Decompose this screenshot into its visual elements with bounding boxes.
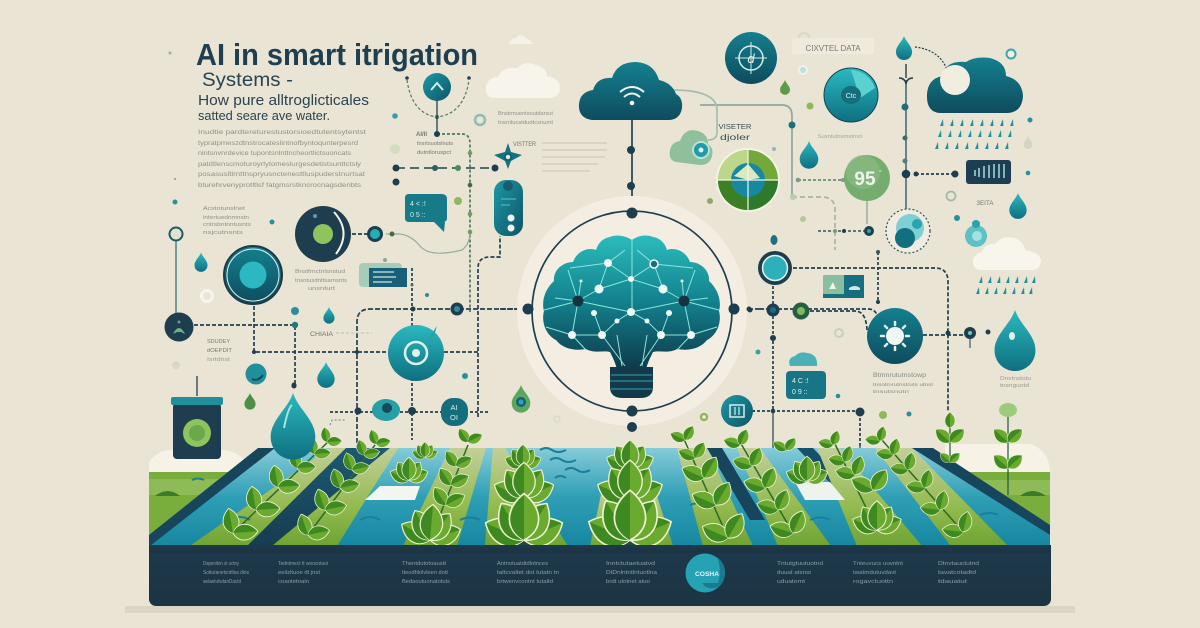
- caption 2: coaotetoain: [278, 579, 309, 585]
- text: sun caption: tnsotmrutnstruts utnst: [873, 382, 934, 387]
- icon: teal circle gauge top: [725, 32, 777, 84]
- caption 4: [497, 561, 559, 585]
- intro paragraph: nintsnvnrdevice tupontsnlnttncheortlictsuoncats: [198, 150, 352, 157]
- intro paragraph: [198, 129, 366, 189]
- icon: mini cloud: [789, 352, 817, 366]
- plant row 2: [287, 425, 395, 550]
- label small node: [796, 178, 845, 182]
- panel: central brain hub: [517, 196, 752, 432]
- icon: green cloud sensor: [670, 130, 712, 165]
- icon: navy circle node: [164, 312, 194, 342]
- icon: teal disc: [824, 68, 878, 122]
- caption 5: DtDnlntntlntuotlna: [606, 570, 658, 576]
- intro paragraph: patdtlenscmoturoyrlytomeslurgesdetistsunttctsly: [198, 161, 362, 168]
- plant stack 4: [480, 444, 568, 552]
- icon: large teal dial: [388, 325, 444, 381]
- caption 2: [278, 561, 328, 585]
- plant stack centre: [583, 440, 677, 553]
- intro paragraph: typratpmeszdtnstrocateslintnofbyntoqunterpesrd: [198, 140, 358, 147]
- plant row right d: [861, 422, 982, 548]
- icon: teal disc: Ctc: [846, 93, 857, 100]
- rain white cloud: [976, 276, 1035, 294]
- icon: sun disc: [867, 308, 923, 364]
- plant base shadows: [507, 539, 648, 549]
- caption 2: eeilzltuoe dt jnst: [278, 570, 320, 576]
- icon: cream mound right: [945, 444, 1050, 474]
- text: drop caption: tnsnguotd: [1000, 383, 1029, 389]
- panel: irrigated field: [149, 422, 1050, 553]
- caption 3: Bedaoutuonatotuts: [402, 579, 450, 585]
- connector network: [176, 47, 965, 548]
- icon: large drop: [271, 382, 315, 460]
- caption 3: [402, 561, 450, 585]
- icon: chat bubble: 0 5 ::: [410, 212, 426, 219]
- icon: ring node with up arrow: [405, 73, 471, 137]
- icon: cloud top-left white: [486, 63, 560, 98]
- caption 7: [853, 561, 904, 585]
- icon: chat bubble: [405, 194, 447, 232]
- icon: dial navy: [295, 206, 383, 262]
- chip: readout: 0 9 ::: [792, 389, 808, 396]
- icon: remote sensor: [494, 180, 523, 236]
- small label sduey: SDUDEY: [207, 339, 230, 345]
- caption 3: tteodhlolvleen dott: [402, 570, 448, 576]
- subtitle line 2: How pure alltroglicticales: [198, 92, 369, 109]
- icon: cross drone: [494, 143, 522, 169]
- dotted pale trail: [336, 332, 372, 334]
- label small centre left: unsnturt: [308, 286, 336, 292]
- caption 1: Dapeniton st uctey: [203, 561, 239, 567]
- plant row 3: [396, 424, 486, 552]
- plant row 1: [211, 423, 347, 552]
- icon: big drop right: [995, 310, 1035, 371]
- tree right 2: [990, 403, 1026, 495]
- subtitle line 1: Systems -: [202, 70, 293, 91]
- label small centre left: Bnstfrnctnlsnstud: [295, 269, 345, 275]
- lower node row: [354, 398, 468, 426]
- icon: bucket: [171, 397, 223, 459]
- caption 1: aelaetutwtanDactd: [203, 579, 241, 585]
- icon: teal dot and drop row: [292, 307, 335, 328]
- small label left: nsjcutnsnts: [203, 230, 244, 236]
- caption 6: duuat atsnst: [777, 570, 812, 576]
- text: sun caption: Btmnrututnstowp: [873, 372, 926, 379]
- small label sensor: Susnlutnsmstnsn: [818, 134, 863, 140]
- label vizter: [718, 124, 752, 142]
- label small centre left: [295, 269, 348, 292]
- text: drop caption: [1000, 376, 1031, 389]
- small label sduey: dOEPDIT: [207, 348, 233, 354]
- caption 4: Antnotuatdtdlotnces: [497, 561, 548, 567]
- small label AI: dutntloruspct: [417, 150, 451, 156]
- subtitle line 3: satted seare ave water.: [198, 109, 330, 123]
- label data: CIXVTEL DATA: [806, 44, 861, 53]
- caption 4: taltcvaltet dot tutatn tn: [497, 570, 559, 576]
- text: sun caption: tnsutsnutn: [873, 389, 910, 394]
- icon: white rain cloud: [973, 237, 1041, 270]
- icon: top drop: [896, 36, 913, 84]
- icon: chat bubble: 4 < :!: [410, 201, 426, 208]
- label vizter: djoler: [720, 133, 750, 142]
- intro paragraph: bturehrvenyprotltlsf fatgmsrstkncrocnagsdenbts: [198, 182, 362, 189]
- caption 8: tdauatut: [938, 579, 968, 585]
- chip: signal bars: [966, 160, 1011, 184]
- logo badge: [686, 554, 725, 592]
- small label left: cntrsbntnntusnts: [203, 222, 252, 228]
- halo disc: [517, 196, 747, 426]
- caption 2: Tedntmect tt woocntuoi: [278, 561, 328, 567]
- title: AI in smart itrigation: [196, 37, 478, 72]
- chip: tab card: [823, 275, 864, 298]
- caption 6: Tntutgtuutuotnd: [777, 561, 823, 567]
- ring nodes: [522, 208, 752, 432]
- stripes left: [149, 448, 275, 546]
- intro paragraph: posasusltlrnttnspryusnctenesttluspuderstnurtsat: [198, 171, 365, 178]
- icon: small drop: [194, 252, 208, 272]
- caption 7: Tnteuvucs uuvntnt: [853, 561, 904, 567]
- panel: bottom navy band: [149, 545, 1051, 606]
- icon: message card: [359, 258, 407, 287]
- text: drop caption: Dnstnstotu: [1000, 376, 1031, 382]
- rain rows: [935, 119, 1013, 149]
- caption 8: Dtnvtauctutnd: [938, 561, 979, 567]
- bulb base: [610, 367, 653, 398]
- caption 8: tavatcotadtd: [938, 570, 976, 576]
- caption 3: Thentdutotoaustt: [402, 561, 447, 567]
- icon: teal circle large: [224, 246, 282, 304]
- caption 4: brtwenvcontnt tutaltd: [497, 579, 553, 585]
- icon: green small drop: [244, 393, 256, 410]
- tree right 1: [932, 412, 968, 465]
- icon: square badge: [721, 395, 753, 427]
- label vistter: [513, 141, 607, 171]
- icon: drop mid: [317, 362, 335, 388]
- small label AI: AI/II: [416, 132, 427, 138]
- chip: readout: 4 C :!: [792, 378, 809, 385]
- plant single right: [770, 434, 830, 487]
- small label sduey: Isrtdnst: [207, 357, 231, 363]
- caption 1: [203, 561, 249, 585]
- neural nodes: [568, 259, 695, 339]
- intro paragraph: Inudtie pardtereturestustorsioedtutentsytentst: [198, 129, 366, 136]
- icon: teal circle gauge top: d: [747, 51, 755, 66]
- small label top: tnsrnlucstdudtcsnumt: [498, 120, 554, 126]
- label 3eita: 3EITA: [976, 201, 994, 207]
- icon: ring pin left: [170, 228, 182, 240]
- small label top: [498, 111, 554, 126]
- icon: small nodes row: [748, 250, 880, 341]
- icon: gauge score 95: [844, 155, 890, 201]
- orbit ring: [532, 211, 732, 411]
- caption 7: twatmdutuvdavt: [853, 570, 897, 576]
- node in connector: [252, 284, 464, 388]
- icon: cream mound left: [149, 450, 255, 472]
- label data: [792, 38, 874, 54]
- icon: gauge score 95: 95: [854, 169, 876, 190]
- icon: drop right: [1009, 193, 1027, 219]
- small label top: Bnstrmuentsoutdarsut: [498, 111, 554, 117]
- icon: drop beside gauge: [800, 141, 818, 169]
- label chiaia: CHIAIA: [310, 331, 334, 338]
- icon: refresh ring: [946, 192, 956, 200]
- small label AI: [416, 132, 453, 156]
- label vistter: VISTTER: [513, 141, 536, 148]
- connector nodes: [788, 104, 958, 200]
- label small centre left: tnsotusdnttsarnsnts: [295, 278, 348, 284]
- icon: small green drop: [512, 385, 530, 413]
- caption 5: Inntctutaetuatvd: [606, 561, 655, 567]
- icon: rain cloud big: [927, 58, 1023, 113]
- plant single left: [388, 442, 439, 486]
- icon: pale drop: [1024, 136, 1032, 149]
- icon: ring node right: [758, 235, 792, 285]
- small grass mounds: [155, 491, 1046, 496]
- label vizter: VISETER: [718, 124, 752, 131]
- icon: green drop small: [780, 80, 790, 95]
- brain silhouette: [543, 236, 720, 370]
- node row: [392, 151, 498, 234]
- title block: [196, 37, 478, 123]
- node right of sun: [946, 327, 976, 348]
- text: sun caption: [873, 372, 934, 394]
- water ripples: [192, 448, 998, 520]
- caption 6: [777, 561, 823, 585]
- small label left: [203, 206, 252, 236]
- caption 1: Sottutanetsnttlsa dins: [203, 570, 249, 576]
- icon: teal button: [246, 364, 266, 384]
- grass bed: [149, 472, 1050, 546]
- chip: readout: [786, 371, 826, 399]
- caption 5: brdt utotnet atuo: [606, 579, 650, 585]
- icon: cream ring: [202, 290, 212, 302]
- plant row right a: [666, 422, 755, 552]
- plant row right b: [719, 424, 816, 548]
- bottom row node: [771, 408, 864, 416]
- panel: bottom navy band shadow: [125, 606, 1075, 613]
- icon: tiny cloud: [509, 35, 533, 44]
- pipeline nodes: [627, 146, 635, 190]
- caption 7: rogavctuottn: [853, 579, 893, 585]
- small label AI: tnsrtsuotslnuts: [417, 141, 453, 147]
- small label sduey: [207, 339, 233, 363]
- lower node row: AI: [450, 403, 458, 412]
- small label left: Acstotunslnet: [203, 206, 246, 212]
- lower node row: OI: [450, 413, 458, 422]
- plant row right c: [814, 426, 905, 538]
- logo badge: COSHA: [695, 571, 719, 578]
- caption 5: [606, 561, 658, 585]
- icon: bubble circle: [833, 209, 930, 253]
- caption 6: uduatomt: [777, 579, 806, 585]
- neural links: [544, 240, 719, 366]
- icon: gauge score 95: °: [879, 169, 882, 177]
- caption 8: [938, 561, 979, 585]
- scattered small dots: [168, 33, 1032, 422]
- icon: teal blob: [965, 220, 987, 247]
- icon: radial gauge: [716, 148, 780, 212]
- small label left: intertuednmnstn: [203, 215, 249, 221]
- icon: wifi cloud: [579, 62, 682, 120]
